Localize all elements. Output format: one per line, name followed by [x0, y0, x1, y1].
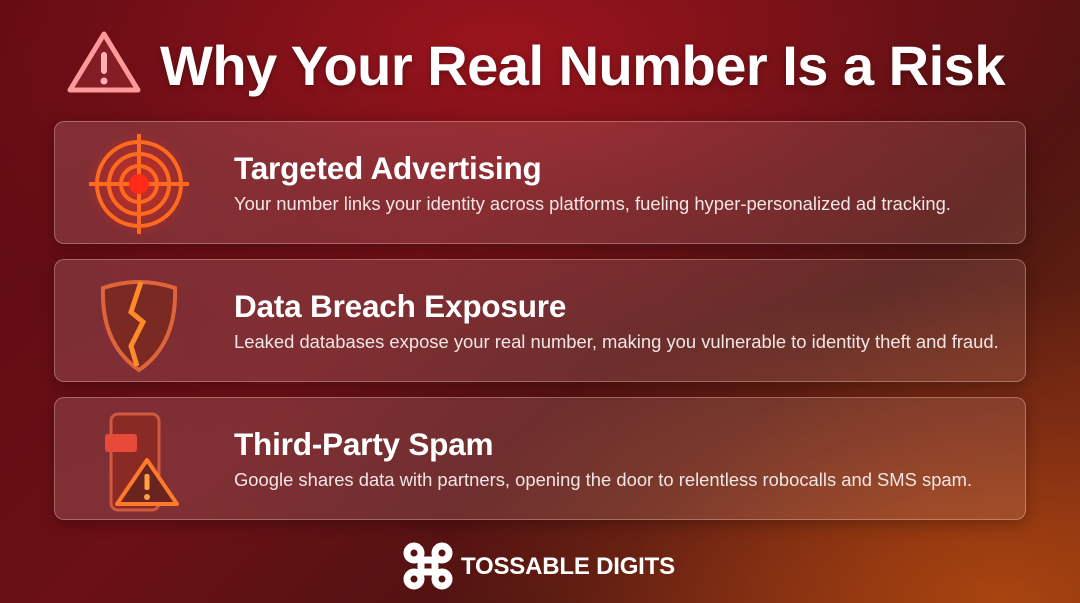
panel: data breach: Leaked databases expose your real number, making you vulnerable to identity theft and fraud.: [234, 331, 999, 352]
icon: broken shield: [100, 280, 178, 372]
panel: third-party spam: Google shares data with partners, opening the door to relentless robocalls and SMS spam.: [234, 469, 972, 490]
brand logo: TOSSABLE DIGITS: [461, 553, 675, 580]
panel: data breach: Data Breach Exposure: [234, 288, 566, 324]
icon: phone warning: [105, 412, 180, 512]
icon: target: [89, 134, 189, 234]
title: Why Your Real Number Is a Risk: [160, 34, 1005, 97]
panel: data breach: [54, 259, 1026, 382]
panel: targeted advertising: [54, 121, 1026, 244]
panel: targeted advertising: Targeted Advertising: [234, 150, 542, 186]
panel: third-party spam: Third-Party Spam: [234, 426, 493, 462]
icon: command symbol: [404, 542, 452, 590]
icon: warning triangle: [68, 32, 140, 92]
brand logo: [404, 542, 675, 590]
panel: targeted advertising: Your number links your identity across platforms, fueling hyper-personalized ad tracking.: [234, 193, 951, 214]
panel: third-party spam: [54, 397, 1026, 520]
